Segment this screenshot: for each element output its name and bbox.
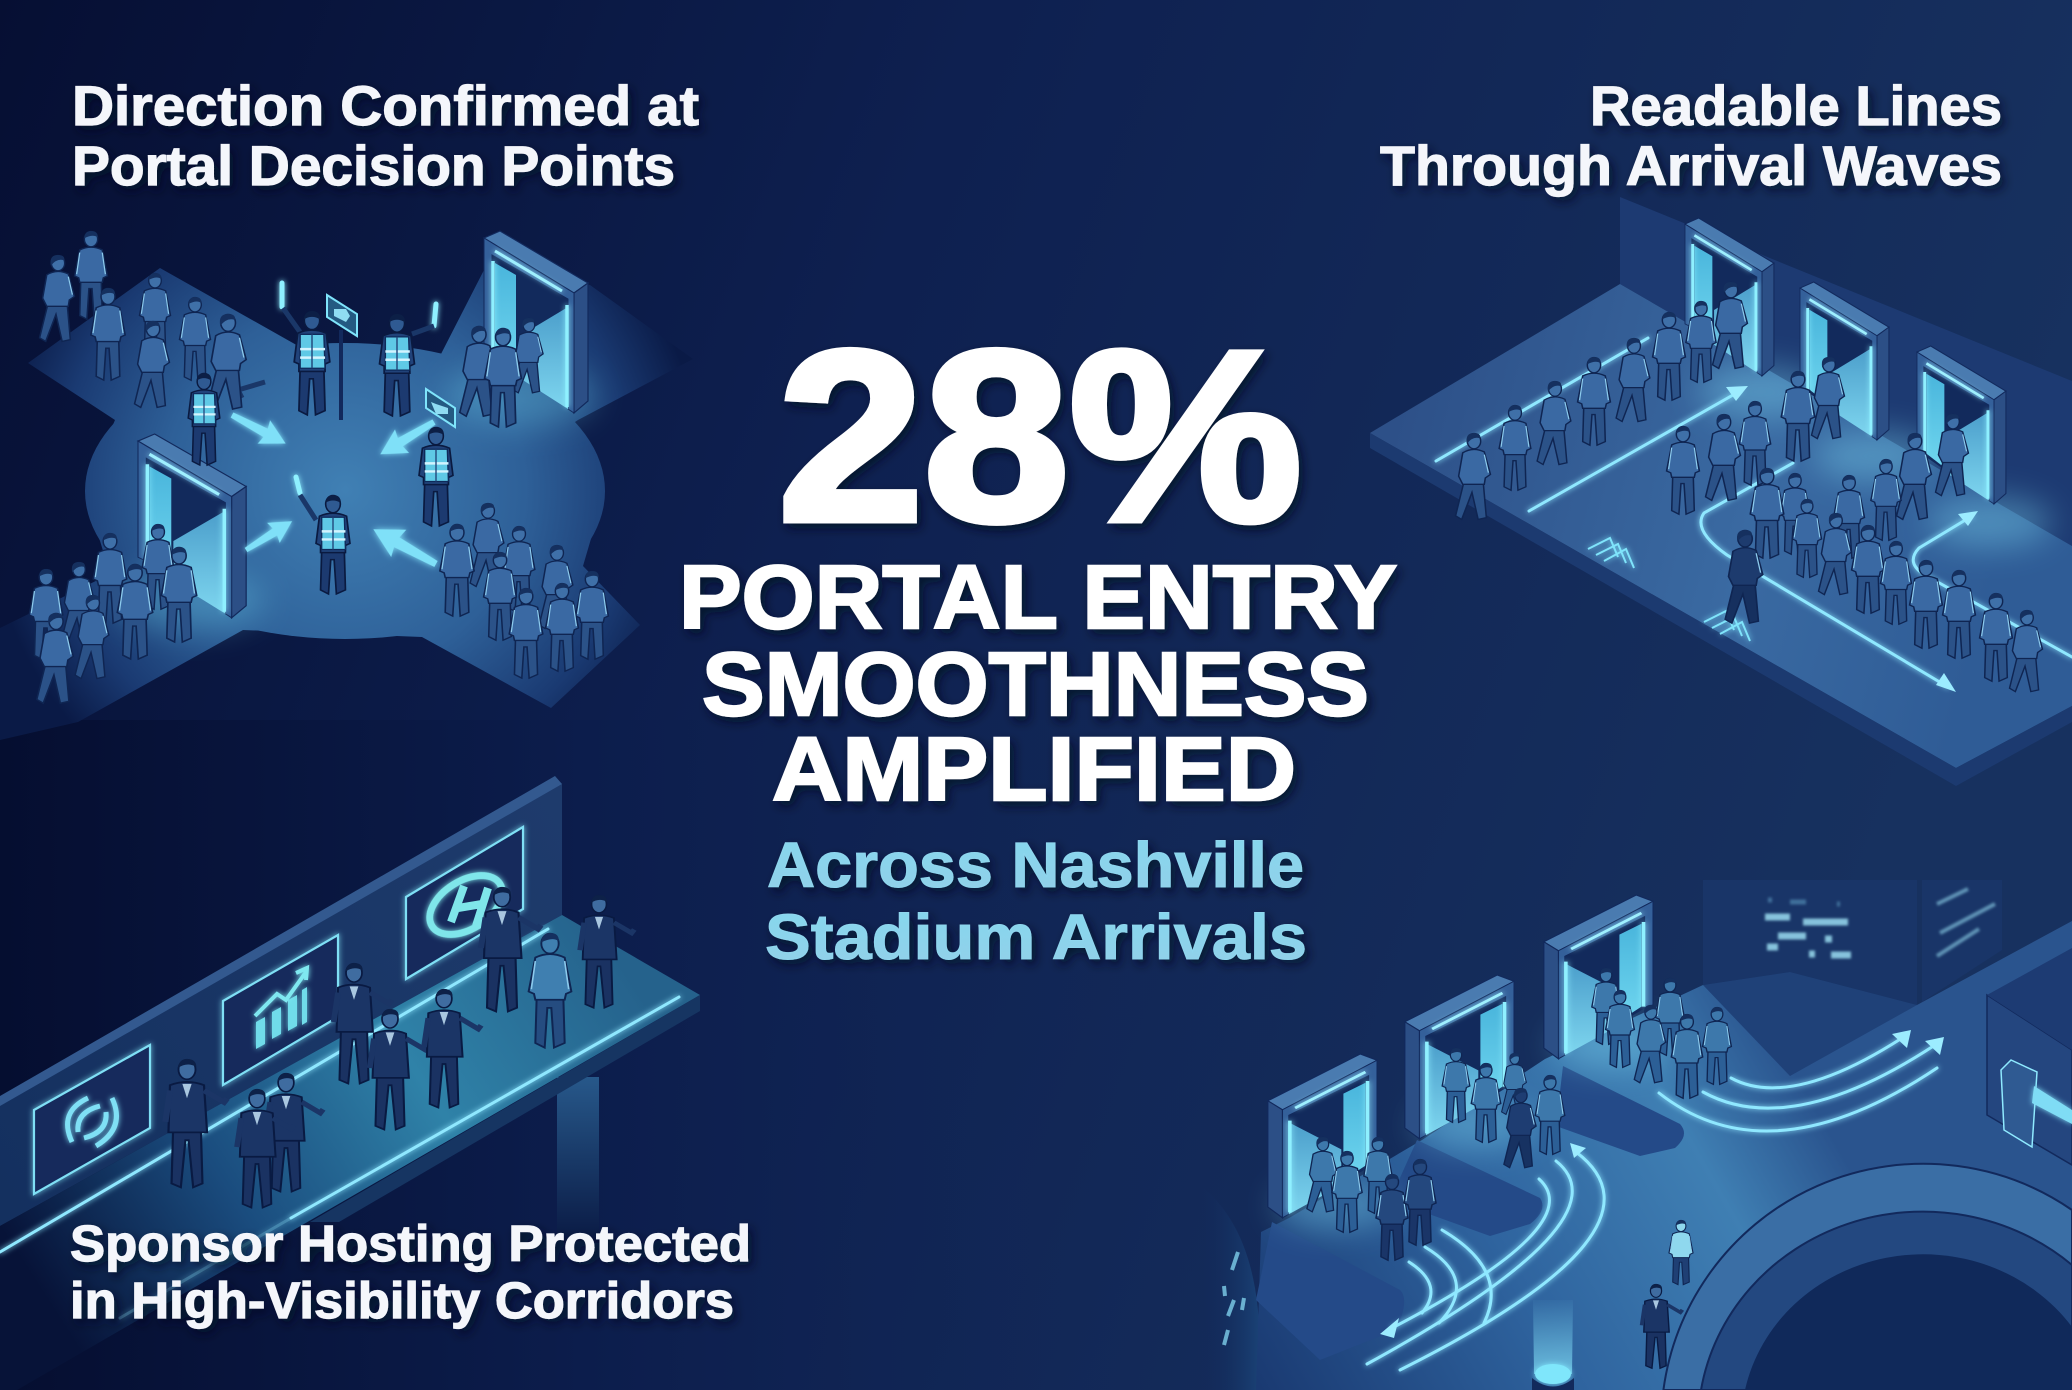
door light spill — [1698, 366, 2052, 548]
title: top left caption: Portal Decision Points — [72, 134, 675, 197]
crowd: upper right door — [460, 318, 543, 427]
support column — [557, 1077, 599, 1242]
corner kiosk block — [1987, 948, 2072, 1165]
title: top right caption: Readable Lines — [1590, 74, 2002, 137]
queue floor platform — [1370, 284, 2072, 768]
glowing floor lines — [0, 929, 679, 1318]
sponsor wall — [0, 780, 562, 1226]
panel: sponsor hosting scene — [0, 776, 700, 1390]
wall top edge — [0, 776, 562, 1106]
headline text: SMOOTHNESS — [702, 635, 1369, 735]
secondary screen — [1937, 889, 1995, 956]
title: bottom left caption — [70, 1215, 751, 1329]
door light spill — [115, 363, 595, 630]
light beacon — [1532, 1300, 1574, 1390]
doorway: lower left — [138, 434, 246, 618]
screen: hyundai logo — [406, 827, 523, 979]
upper flow lines — [1659, 1030, 1944, 1131]
concourse floor — [1256, 921, 2072, 1390]
central headline — [679, 301, 1397, 973]
door light spill — [1275, 1021, 1672, 1229]
subheading: Across Nashville — [767, 829, 1304, 901]
headline text: PORTAL ENTRY — [679, 548, 1397, 648]
queue of people — [1456, 282, 2042, 692]
sponsors and guests — [165, 887, 634, 1208]
crowd: lower left door — [29, 524, 197, 703]
floor chevrons — [1588, 538, 1750, 641]
doorways — [1685, 218, 2006, 504]
queue of people at doors — [1307, 968, 1731, 1260]
floor shadows — [1256, 1066, 1684, 1360]
screen: growth chart — [223, 935, 338, 1085]
floor lip — [310, 995, 700, 1222]
subheading — [765, 829, 1307, 973]
guidance arrows — [226, 403, 444, 578]
background lower left shade — [0, 720, 1300, 1390]
doorways — [1268, 895, 1653, 1218]
panel: readable lines scene — [1370, 197, 2072, 786]
title: top right caption — [1380, 74, 2002, 197]
corridor floor — [0, 915, 700, 1390]
platform lip — [1370, 433, 2072, 786]
floor: cross-shaped plaza — [0, 268, 693, 740]
staff near ring — [1642, 1220, 1693, 1368]
title: top left caption: Direction Confirmed at — [72, 74, 699, 137]
back wall — [1620, 197, 2072, 546]
title: bottom left caption: Sponsor Hosting Protected — [70, 1215, 751, 1272]
lower flow lines — [1367, 1143, 1604, 1370]
side dome — [1200, 1185, 1260, 1390]
title: top left caption — [72, 74, 699, 197]
crowd: lower right — [440, 503, 608, 678]
headline text: AMPLIFIED — [772, 720, 1296, 820]
back wall panel — [1703, 880, 1917, 1005]
title: bottom left caption: in High-Visibility Corridors — [70, 1272, 734, 1329]
headline text — [679, 548, 1397, 820]
title: top right caption: Through Arrival Waves — [1380, 134, 2002, 197]
doorway: upper right — [484, 231, 588, 413]
crowd: upper left — [40, 231, 246, 409]
panel: direction confirmed scene — [0, 231, 693, 740]
big number: 28% — [778, 301, 1302, 572]
glowing lane lines — [1436, 338, 2072, 692]
directional signs and wands — [238, 283, 455, 520]
marshals in vests — [188, 311, 453, 594]
panel: bottom right concourse scene — [1200, 880, 2072, 1390]
screen: swirl logo — [34, 1045, 150, 1194]
wayfinding screen — [1765, 900, 1851, 955]
projection wedge — [1703, 972, 1917, 1076]
subheading: Stadium Arrivals — [765, 901, 1307, 973]
arrival ring structure — [1663, 1164, 2072, 1390]
second wall panel — [1922, 880, 2002, 1002]
